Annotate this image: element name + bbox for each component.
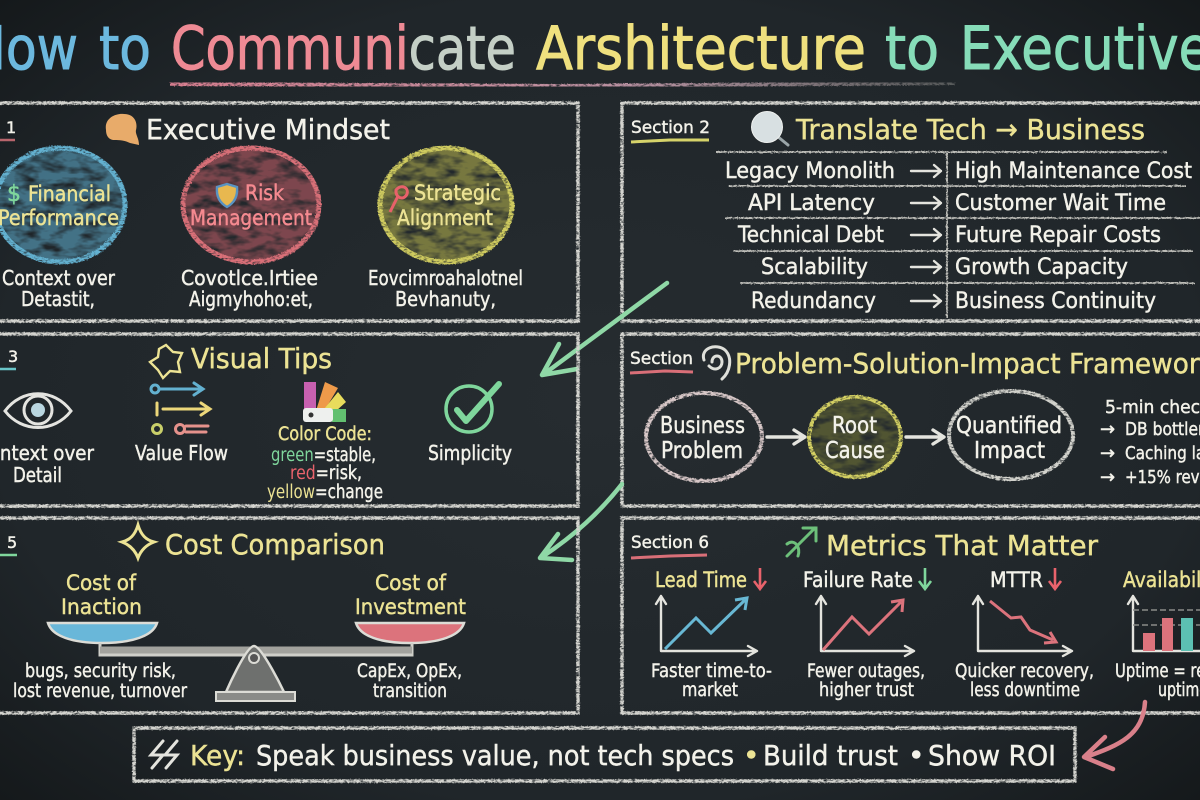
metric: mttr: MTTR bbox=[990, 568, 1043, 592]
icon: balance scale bbox=[48, 623, 464, 701]
caption: financial: Context over bbox=[2, 266, 116, 290]
icon: value flow arrows bbox=[151, 383, 210, 434]
icon: key sparks bbox=[151, 741, 177, 768]
title: Communicate bbox=[171, 14, 516, 84]
key message bbox=[256, 739, 1056, 772]
key message: Show ROI bbox=[928, 739, 1056, 772]
caption: investment costs: transition bbox=[373, 681, 447, 702]
section tag 3: 3 bbox=[8, 347, 18, 366]
metric: lead time: market bbox=[682, 680, 738, 701]
row: api latency bbox=[748, 191, 1166, 216]
icon: eye bbox=[5, 394, 71, 428]
arrow: cause to impact bbox=[906, 430, 944, 444]
caption: investment costs bbox=[357, 661, 462, 702]
key message: Speak business value, not tech specs bbox=[256, 739, 734, 772]
metric: failure rate: Fewer outages, bbox=[807, 661, 925, 682]
caption: simplicity: Simplicity bbox=[428, 441, 512, 465]
section tag 3 bbox=[0, 347, 18, 369]
color code legend: red=risk, bbox=[290, 463, 362, 484]
metric: failure rate: Failure Rate bbox=[803, 568, 913, 592]
color code legend: yellow=change bbox=[267, 482, 383, 503]
node: quantified impact: Quantified bbox=[956, 413, 1062, 439]
row: technical debt: Future Repair Costs bbox=[955, 223, 1161, 248]
icon: sparkle bbox=[150, 345, 182, 378]
caption: risk: Covotlce.Irtiee bbox=[181, 266, 318, 290]
metric: availability bbox=[1115, 568, 1200, 701]
panel: executive mindset bbox=[0, 103, 578, 321]
caption: context over detail: Detail bbox=[13, 463, 62, 487]
label: cost of inaction: Inaction bbox=[61, 595, 142, 619]
row: scalability: Growth Capacity bbox=[955, 255, 1128, 280]
metric: failure rate: higher trust bbox=[819, 680, 914, 701]
icon: brain bbox=[106, 114, 139, 145]
node: business problem: Problem bbox=[661, 438, 743, 464]
panel: visual tips bbox=[0, 334, 578, 506]
circle: strategic alignment: Strategic bbox=[414, 181, 501, 205]
metric: mttr bbox=[955, 568, 1094, 701]
caption: strategic bbox=[368, 266, 523, 311]
icon: sparkle bbox=[122, 525, 154, 558]
label: cost of investment bbox=[355, 571, 466, 619]
section tag 1 bbox=[0, 118, 16, 140]
node: root cause: Cause bbox=[825, 438, 885, 464]
metric: mttr: less downtime bbox=[970, 680, 1080, 701]
node: business problem: Business bbox=[660, 413, 745, 439]
title: Arshitecture bbox=[536, 14, 866, 84]
key message: • bbox=[908, 739, 925, 772]
title: to bbox=[99, 14, 151, 84]
node: root cause: Root bbox=[832, 413, 877, 439]
circle: strategic alignment bbox=[380, 148, 512, 262]
heading: translate tech to business: Translate Tech → Business bbox=[795, 113, 1145, 146]
caption: financial bbox=[2, 266, 116, 311]
label: cost of investment: Cost of bbox=[375, 571, 447, 595]
caption: strategic: Bevhanuty, bbox=[395, 287, 496, 311]
label: cost of inaction bbox=[61, 571, 142, 619]
title bbox=[0, 14, 1200, 84]
caption: inaction costs: lost revenue, turnover bbox=[13, 681, 187, 702]
section tag 6: Section 6 bbox=[631, 533, 709, 553]
heading: executive mindset: Executive Mindset bbox=[146, 113, 390, 146]
color code legend bbox=[267, 424, 383, 503]
example steps: → bbox=[1100, 419, 1115, 440]
title: to bbox=[885, 14, 939, 84]
circle: risk management: Management bbox=[190, 206, 312, 230]
caption: investment costs: CapEx, OpEx, bbox=[357, 661, 462, 682]
section tag 1: 1 bbox=[6, 118, 16, 137]
mapping table bbox=[716, 152, 1200, 318]
caption: value flow: Value Flow bbox=[135, 441, 228, 465]
example steps bbox=[1100, 397, 1200, 488]
label: cost of investment: Investment bbox=[355, 595, 466, 619]
section tag 5 bbox=[0, 533, 17, 555]
circle: strategic alignment: Alignment bbox=[397, 206, 493, 230]
row: technical debt: Technical Debt bbox=[737, 223, 884, 248]
panel: problem solution impact bbox=[622, 334, 1200, 506]
row: legacy monolith: Legacy Monolith bbox=[725, 159, 895, 184]
icon: colour palette bbox=[303, 382, 346, 422]
circle: financial performance: Financial bbox=[28, 182, 111, 206]
icon: growth arrow bbox=[787, 528, 816, 556]
caption: inaction costs: bugs, security risk, bbox=[25, 661, 176, 682]
row: scalability bbox=[761, 255, 1128, 280]
circle: risk management bbox=[183, 148, 319, 262]
row: redundancy: Business Continuity bbox=[955, 289, 1156, 314]
color code legend: green=stable, bbox=[271, 445, 376, 466]
caption: strategic: Eovcimroahalotnel bbox=[368, 266, 523, 290]
heading: metrics that matter: Metrics That Matter bbox=[826, 529, 1098, 562]
row: redundancy bbox=[751, 289, 1156, 314]
example steps: → bbox=[1100, 443, 1115, 464]
section tag 2: Section 2 bbox=[631, 118, 710, 138]
row: api latency: API Latency bbox=[748, 191, 875, 216]
row: redundancy: Redundancy bbox=[751, 289, 876, 314]
label: cost of inaction: Cost of bbox=[66, 571, 137, 595]
metric: lead time: Faster time-to- bbox=[651, 661, 772, 682]
circle: risk management: Risk bbox=[245, 181, 285, 205]
key label: Key: bbox=[190, 739, 245, 772]
arrow: green, section 2 to section 3 bbox=[542, 283, 667, 375]
caption: risk bbox=[181, 266, 318, 311]
icon: magnifier bbox=[752, 112, 788, 145]
circle: financial performance bbox=[0, 148, 125, 262]
panel: translate tech to business bbox=[622, 103, 1200, 321]
key message: • bbox=[743, 739, 760, 772]
key takeaway box bbox=[134, 728, 1075, 781]
section tag 4: Section bbox=[630, 349, 693, 369]
circle: financial performance: $ bbox=[7, 182, 21, 207]
metric: mttr: Quicker recovery, bbox=[955, 661, 1094, 682]
arrow: green, section 4 to section 5 bbox=[540, 484, 622, 560]
key message: Build trust bbox=[763, 739, 898, 772]
node: business problem bbox=[646, 393, 762, 481]
example steps: → bbox=[1100, 467, 1115, 488]
caption: context over detail bbox=[0, 441, 95, 487]
arrow: problem to cause bbox=[767, 430, 805, 444]
caption: risk: Aigmyhoho:et, bbox=[189, 287, 313, 311]
row: scalability: Scalability bbox=[761, 255, 868, 280]
node: root cause bbox=[809, 397, 901, 477]
row: legacy monolith bbox=[725, 159, 1192, 184]
icon: check bbox=[446, 384, 499, 432]
color code legend: Color Code: bbox=[278, 424, 372, 445]
panel: cost comparison bbox=[0, 518, 578, 713]
heading: visual tips: Visual Tips bbox=[191, 342, 332, 375]
row: technical debt bbox=[737, 223, 1161, 248]
caption: financial: Detastit, bbox=[21, 287, 95, 311]
metric: lead time: Lead Time bbox=[655, 568, 747, 592]
caption: inaction costs bbox=[13, 661, 187, 702]
icon: swirl bbox=[703, 347, 730, 379]
section tag 5: 5 bbox=[7, 533, 17, 552]
metric: failure rate bbox=[803, 568, 931, 701]
node: quantified impact: Impact bbox=[974, 438, 1045, 464]
node: quantified impact bbox=[949, 391, 1073, 479]
circle: financial performance: Performance bbox=[0, 206, 119, 230]
arrow: pink, metrics to key bbox=[1084, 702, 1145, 769]
panel: metrics that matter bbox=[622, 518, 1200, 713]
row: api latency: Customer Wait Time bbox=[955, 191, 1166, 216]
metric: lead time bbox=[651, 568, 772, 701]
heading: cost comparison: Cost Comparison bbox=[165, 528, 385, 561]
